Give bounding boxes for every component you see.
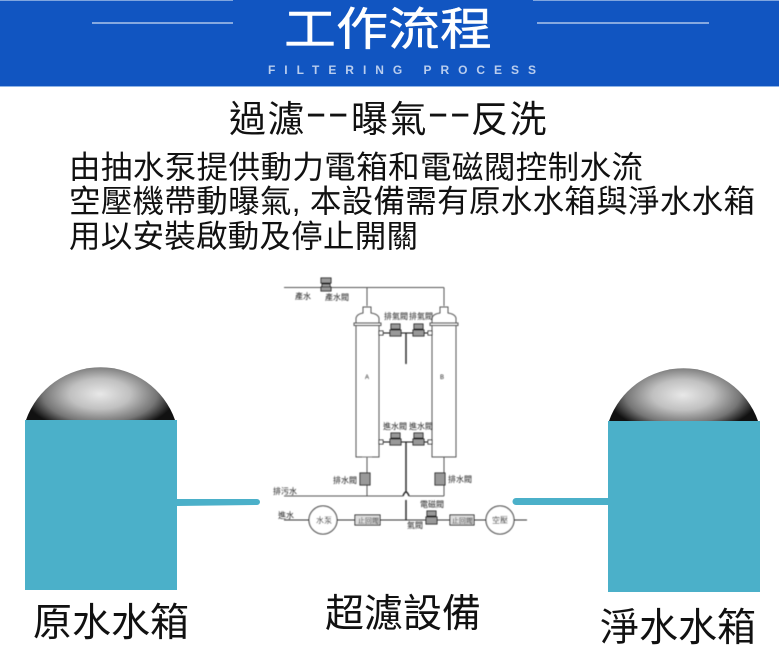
label: ultrafiltration equipment: 超濾設備 [325, 593, 481, 636]
schematic labels: 進水 [278, 510, 294, 520]
heading: 曝氣 [351, 99, 428, 140]
piping [284, 288, 444, 496]
subtitle: FILTERING PROCESS [268, 63, 536, 77]
schematic labels: 排水閥 [333, 475, 357, 485]
pumps and check valves [309, 506, 514, 534]
clean water tank [512, 368, 760, 592]
schematic labels: 進水閥 [409, 421, 433, 431]
tank dome [26, 367, 175, 420]
heading: 反洗 [471, 99, 548, 140]
vessel A: A [365, 375, 369, 381]
vessel B: B [440, 375, 444, 381]
tank dome [609, 368, 758, 421]
valves [321, 278, 445, 524]
schematic labels: 排氣閥 [384, 311, 408, 321]
header banner [0, 0, 779, 87]
description text: 由抽水泵提供動力電箱和電磁閥控制水流 [69, 149, 643, 185]
label: clean water tank: 淨水水箱 [600, 607, 756, 650]
vessel B [430, 307, 458, 457]
heading: -- [305, 92, 349, 133]
schematic labels: 空壓 [492, 515, 508, 525]
schematic labels: 產水 [295, 291, 311, 301]
schematic labels: 排水閥 [448, 474, 472, 484]
schematic labels: 氣閥 [407, 520, 423, 530]
heading: 過濾 [229, 99, 306, 140]
heading [229, 92, 548, 140]
tank body [608, 421, 760, 592]
schematic labels [273, 291, 508, 530]
description text: 用以安裝啟動及停止開關 [69, 218, 418, 254]
schematic labels: 進水閥 [383, 421, 407, 431]
raw water tank [25, 367, 260, 590]
description text [69, 149, 755, 254]
schematic labels: 排污水 [273, 486, 297, 496]
schematic labels: 排氣閥 [409, 311, 433, 321]
ultrafiltration schematic [273, 278, 527, 534]
vessel A [354, 307, 381, 457]
inlet pipe [512, 498, 608, 505]
schematic labels: 止回閥 [358, 516, 379, 525]
label: raw water tank: 原水水箱 [33, 602, 189, 645]
heading: -- [427, 92, 471, 133]
schematic labels: 水泵 [316, 515, 332, 525]
tank body [25, 420, 177, 590]
description text: 空壓機帶動曝氣, 本設備需有原水水箱與淨水水箱 [69, 183, 755, 219]
schematic labels: 止回閥 [452, 516, 473, 525]
outlet pipe [177, 499, 260, 506]
schematic labels: 產水閥 [325, 292, 349, 302]
title: 工作流程 [284, 5, 492, 55]
schematic labels: 電磁閥 [420, 499, 444, 509]
